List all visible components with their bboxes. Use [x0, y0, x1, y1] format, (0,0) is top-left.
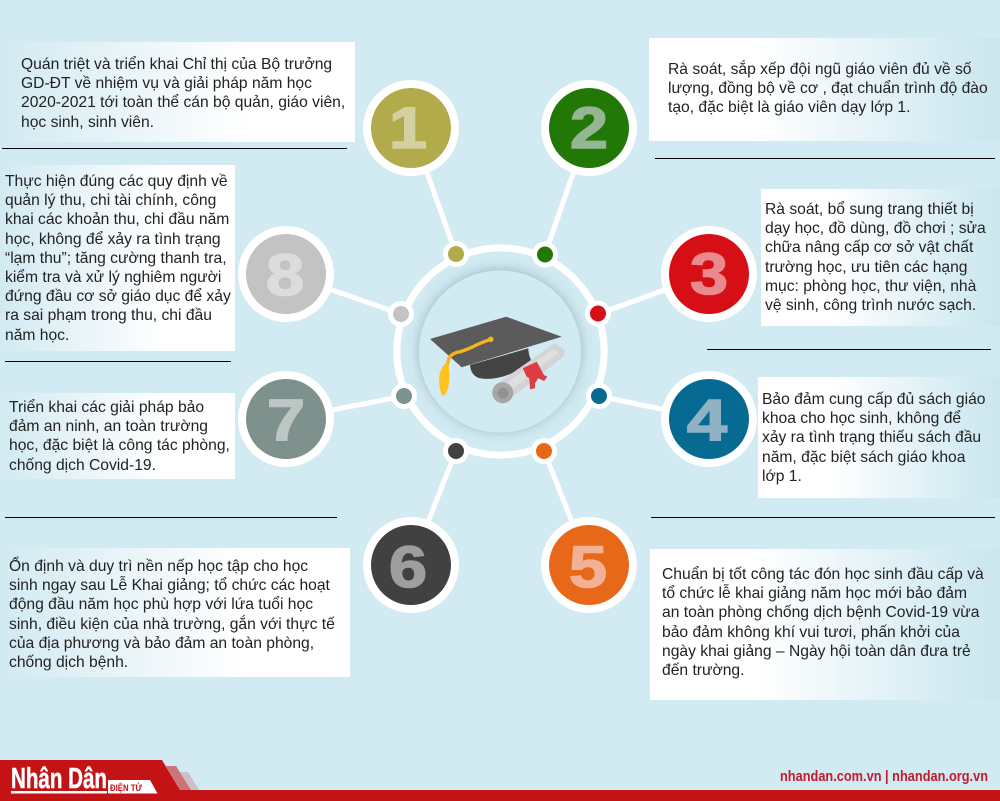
- text block 8: [5, 173, 231, 344]
- text block 3: chữa nâng cấp cơ sở vật chất: [765, 239, 973, 256]
- text block 3: dạy học, đồ dùng, đồ chơi ; sửa: [765, 220, 986, 237]
- text block 3: trường học, ưu tiên các hạng: [765, 259, 968, 276]
- panel 7: school safety text: [0, 393, 235, 479]
- number badge 8: [238, 226, 334, 322]
- number badge 1: [363, 80, 459, 176]
- text block 5: Chuẩn bị tốt công tác đón học sinh đầu cấp và: [662, 566, 984, 583]
- number badge 2: 2: [570, 96, 608, 161]
- text block 4: khoa cho học sinh, không để: [762, 410, 961, 427]
- text block 6: động đầu năm học phù hợp với lứa tuổi học: [9, 596, 313, 613]
- diploma scroll: [492, 343, 565, 403]
- text block 8: “lạm thu”; tăng cường thanh tra,: [5, 250, 227, 267]
- hub diagram: ring, spokes and cap: [286, 128, 709, 565]
- number badge 3: 3: [690, 242, 728, 307]
- text block 4: năm, đặc biệt sách giáo khoa: [762, 449, 965, 466]
- node dot 7: [391, 383, 417, 409]
- text block 4: Bảo đảm cung cấp đủ sách giáo: [762, 391, 985, 408]
- number badge 8: 8: [266, 243, 304, 308]
- cap base: [470, 348, 532, 379]
- text block 8: quản lý thu, chi tài chính, công: [5, 192, 216, 209]
- text block 1: GD-ĐT về nhiệm vụ và giải pháp năm học: [21, 75, 312, 92]
- text block 5: an toàn phòng chống dịch bệnh Covid-19 vừa: [662, 604, 979, 621]
- text block 8: Thực hiện đúng các quy định về: [5, 173, 228, 190]
- logo: Nhân Dân Điện Tử: ĐIỆN TỬ: [110, 782, 142, 794]
- text block 6: [9, 556, 335, 671]
- node dot 4: [586, 383, 612, 409]
- number badge 7: [238, 371, 334, 467]
- number badge 1: 1: [389, 96, 427, 161]
- text block 2: Rà soát, sắp xếp đội ngũ giáo viên đủ về số: [668, 61, 971, 78]
- panel 8: finance text: [0, 165, 235, 351]
- text block 7: chống dịch Covid-19.: [9, 457, 156, 474]
- text block 2: tạo, đặc biệt là giáo viên dạy lớp 1.: [668, 99, 910, 116]
- text block 4: lớp 1.: [762, 468, 802, 485]
- number badge 4: 4: [687, 388, 727, 453]
- text block 8: ra sai phạm trong thu, chi đầu: [5, 307, 212, 324]
- number badge 5: [541, 517, 637, 613]
- text block 3: mục: phòng học, thư viện, nhà: [765, 278, 976, 295]
- text block 8: học, không để xảy ra tình trạng: [5, 231, 221, 248]
- panel 6: learning routine text: [0, 548, 350, 677]
- number badge 2: [541, 80, 637, 176]
- inner circle: [419, 270, 581, 432]
- logo: Nhân Dân Điện Tử: Nhân Dân: [11, 763, 107, 795]
- text block 5: [662, 566, 984, 679]
- text block 8: kiểm tra và xử lý nghiêm người: [5, 269, 221, 286]
- text block 8: khai các khoản thu, chi đầu năm: [5, 211, 229, 228]
- text block 6: Ổn định và duy trì nền nếp học tập cho học: [9, 558, 308, 575]
- footer band: [0, 760, 1000, 801]
- node dot 6: [443, 438, 469, 464]
- text block 6: của địa phương và bảo đảm an toàn phòng,: [9, 635, 314, 652]
- text block 4: [762, 391, 985, 485]
- node dot 8: [388, 301, 414, 327]
- number badge 4: [661, 371, 757, 467]
- text block 2: [668, 60, 988, 116]
- node dot 3: [585, 300, 611, 326]
- text block 1: [21, 56, 345, 131]
- outer ring: [397, 248, 604, 455]
- tassel: [439, 336, 494, 395]
- text block 5: tổ chức lễ khai giảng năm học mới bảo đảm: [662, 585, 967, 602]
- text block 7: [9, 399, 230, 474]
- text block 4: xảy ra tình trạng thiếu sách đầu: [762, 429, 981, 446]
- text block 5: ngày khai giảng – Ngày hội toàn dân đưa trẻ: [662, 643, 971, 660]
- number badge 3: [661, 226, 757, 322]
- text block 6: chống dịch bệnh.: [9, 654, 128, 671]
- number badge 6: 6: [389, 535, 427, 600]
- panel 3: equipment text: [761, 189, 1000, 326]
- text block 6: sinh, điều kiện của nhà trường, gắn với thực tế: [9, 616, 335, 633]
- text block 2: lượng, đồng bộ về cơ , đạt chuẩn trình độ đào: [668, 80, 988, 97]
- number badge 6: [363, 517, 459, 613]
- text block 5: đến trường.: [662, 662, 744, 679]
- panel 1: directive text: [0, 42, 355, 142]
- text block 3: vệ sinh, công trình nước sạch.: [765, 297, 976, 314]
- panel 4: textbooks text: [758, 377, 1000, 498]
- text block 1: 2020-2021 tới toàn thể cán bộ quản, giáo viên,: [21, 94, 345, 111]
- text block 3: Rà soát, bổ sung trang thiết bị: [765, 201, 974, 218]
- text block 1: Quán triệt và triển khai Chỉ thị của Bộ trưởng: [21, 56, 332, 73]
- icon: graduation cap and diploma: [430, 317, 565, 403]
- text block 6: sinh ngay sau Lễ Khai giảng; tổ chức các hoạt: [9, 577, 330, 594]
- panel 2: teachers text: [649, 38, 1000, 141]
- text block 8: đứng đầu cơ sở giáo dục để xảy: [5, 288, 231, 305]
- text block 8: năm học.: [5, 327, 69, 344]
- node dot 2: [532, 242, 558, 268]
- text block 5: bảo đảm không khí vui tươi, phấn khởi của: [662, 624, 960, 641]
- number badge 7: 7: [267, 388, 305, 453]
- text block 7: học, đặc biệt là công tác phòng,: [9, 437, 230, 454]
- number badge 5: 5: [569, 535, 607, 600]
- text block 1: học sinh, sinh viên.: [21, 114, 154, 131]
- node dot 5: [531, 438, 557, 464]
- text block 3: [765, 201, 986, 314]
- panel 5: opening ceremony text: [650, 549, 1000, 700]
- node dot 1: [443, 241, 469, 267]
- cap board: [430, 317, 562, 367]
- text block 7: Triển khai các giải pháp bảo: [9, 399, 204, 416]
- text block 7: đảm an ninh, an toàn trường: [9, 418, 208, 435]
- spokes: [286, 128, 709, 565]
